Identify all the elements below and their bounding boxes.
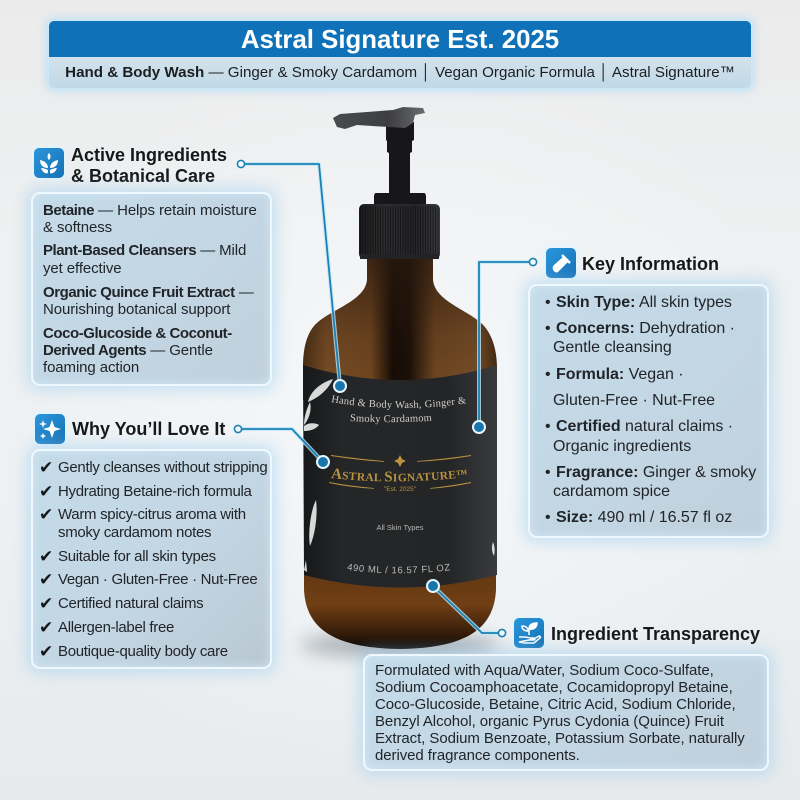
icon: leaves xyxy=(34,148,64,178)
ingredients text: Sodium Cocoamphoacetate, Cocamidopropyl Betaine, xyxy=(375,679,733,696)
key information list: Formula: Vegan · xyxy=(556,366,684,383)
bottle shoulder xyxy=(303,258,497,400)
label leaves xyxy=(304,379,495,572)
label size: 490 ML / 16.57 FL OZ xyxy=(347,564,450,574)
heading: Active Ingredients xyxy=(71,145,227,165)
benefits list: ✔ xyxy=(39,505,53,524)
key information list: • xyxy=(545,366,551,383)
benefits list: smoky cardamom notes xyxy=(58,524,211,541)
heading: Why You’ll Love It xyxy=(72,419,225,439)
ingredient list: Betaine — Helps retain moisture xyxy=(43,202,257,219)
title: Astral Signature Est. 2025 xyxy=(241,26,559,54)
benefits list: Vegan · Gluten-Free · Nut-Free xyxy=(58,571,257,588)
key information list: • xyxy=(545,294,551,311)
benefits list: ✔ xyxy=(39,642,53,661)
ingredient list: yet effective xyxy=(43,260,121,277)
pump stem xyxy=(386,122,414,193)
key information list: Size: 490 ml / 16.57 fl oz xyxy=(556,509,732,526)
ingredients text: derived fragrance components. xyxy=(375,747,580,764)
panel: benefits xyxy=(31,449,272,669)
benefits list: ✔ xyxy=(39,594,53,613)
ingredients text: Benzyl Alcohol, organic Pyrus Cydonia (Quince) Fruit xyxy=(375,713,724,730)
benefits list: ✔ xyxy=(39,547,53,566)
benefits list: Warm spicy-citrus aroma with xyxy=(58,506,246,523)
key information list: Gentle cleansing xyxy=(553,339,672,356)
label skin type: All Skin Types xyxy=(377,523,424,532)
ingredients text: Formulated with Aqua/Water, Sodium Coco-Sulfate, xyxy=(375,662,714,679)
key information list: Skin Type: All skin types xyxy=(556,294,732,311)
benefits list: Hydrating Betaine-rich formula xyxy=(58,483,252,500)
section: why you'll love it xyxy=(20,413,283,680)
key information list: Organic ingredients xyxy=(553,438,691,455)
ingredients text: Coco-Glucoside, Betaine, Citric Acid, Sodium Chloride, xyxy=(375,696,736,713)
ingredient list: Coco-Glucoside & Coconut- xyxy=(43,325,232,342)
label gold logo: ASTRAL SIGNATURE™ xyxy=(331,468,467,482)
ingredient list: Organic Quince Fruit Extract — xyxy=(43,284,254,301)
benefits list: Boutique-quality body care xyxy=(58,643,228,660)
floor shadow xyxy=(300,634,500,656)
benefits list xyxy=(39,458,267,661)
ingredient list xyxy=(43,202,257,376)
ingredient list: foaming action xyxy=(43,359,139,376)
title xyxy=(49,21,751,57)
heading line 2: & Botanical Care xyxy=(71,166,215,186)
panel: ingredients xyxy=(363,654,769,771)
key information list: cardamom spice xyxy=(553,483,670,500)
benefits list: ✔ xyxy=(39,458,53,477)
key information list: • xyxy=(545,418,551,435)
icon: plant in hand xyxy=(514,618,544,648)
benefits list: Gently cleanses without stripping xyxy=(58,459,267,476)
connectors xyxy=(242,164,529,633)
label product name xyxy=(331,395,466,424)
key information list: Fragrance: Ginger & smoky xyxy=(556,464,756,481)
pump head xyxy=(333,107,425,129)
key information list: Gluten-Free · Nut-Free xyxy=(553,392,715,409)
panel: key information xyxy=(528,284,769,538)
section: ingredient transparency xyxy=(352,617,780,782)
benefits list: ✔ xyxy=(39,570,53,589)
key information list: • xyxy=(545,320,551,337)
key information list: Concerns: Dehydration · xyxy=(556,320,735,337)
header banner xyxy=(49,21,751,88)
label xyxy=(303,365,497,588)
pump cap xyxy=(359,193,440,259)
benefits list: ✔ xyxy=(39,618,53,637)
subtitle xyxy=(49,57,751,88)
bottle base xyxy=(304,560,496,649)
label product name: Smoky Cardamom xyxy=(350,414,432,424)
ingredient list: Derived Agents — Gentle xyxy=(43,342,213,359)
panel: active ingredients xyxy=(31,192,272,386)
icon: test tube xyxy=(546,248,576,278)
key information list xyxy=(545,294,756,526)
subtitle: Hand & Body Wash — Ginger & Smoky Cardamom │ Vegan Organic Formula │ Astral Signature™ xyxy=(65,64,735,81)
key information list: • xyxy=(545,509,551,526)
key information list: Certified natural claims · xyxy=(556,418,733,435)
section: key information xyxy=(517,246,780,549)
benefits list: ✔ xyxy=(39,482,53,501)
section: active ingredients xyxy=(20,145,283,397)
ingredient list: Nourishing botanical support xyxy=(43,301,230,318)
ingredient list: & softness xyxy=(43,219,112,236)
ingredient list: Plant-Based Cleansers — Mild xyxy=(43,242,246,259)
heading: Key Information xyxy=(582,254,719,274)
benefits list: Allergen-label free xyxy=(58,619,174,636)
benefits list: Suitable for all skin types xyxy=(58,548,216,565)
label product name: Hand & Body Wash, Ginger & xyxy=(331,395,466,410)
connector end points xyxy=(234,160,537,637)
ingredients text xyxy=(375,662,745,764)
key information list: • xyxy=(545,464,551,481)
ingredients text: Extract, Sodium Benzoate, Potassium Sorbate, naturally xyxy=(375,730,745,747)
benefits list: Certified natural claims xyxy=(58,595,203,612)
label gold logo: "Est. 2025" xyxy=(384,486,417,493)
heading: Ingredient Transparency xyxy=(551,624,760,644)
icon: sparkles xyxy=(35,414,65,444)
label gold logo xyxy=(329,455,471,493)
